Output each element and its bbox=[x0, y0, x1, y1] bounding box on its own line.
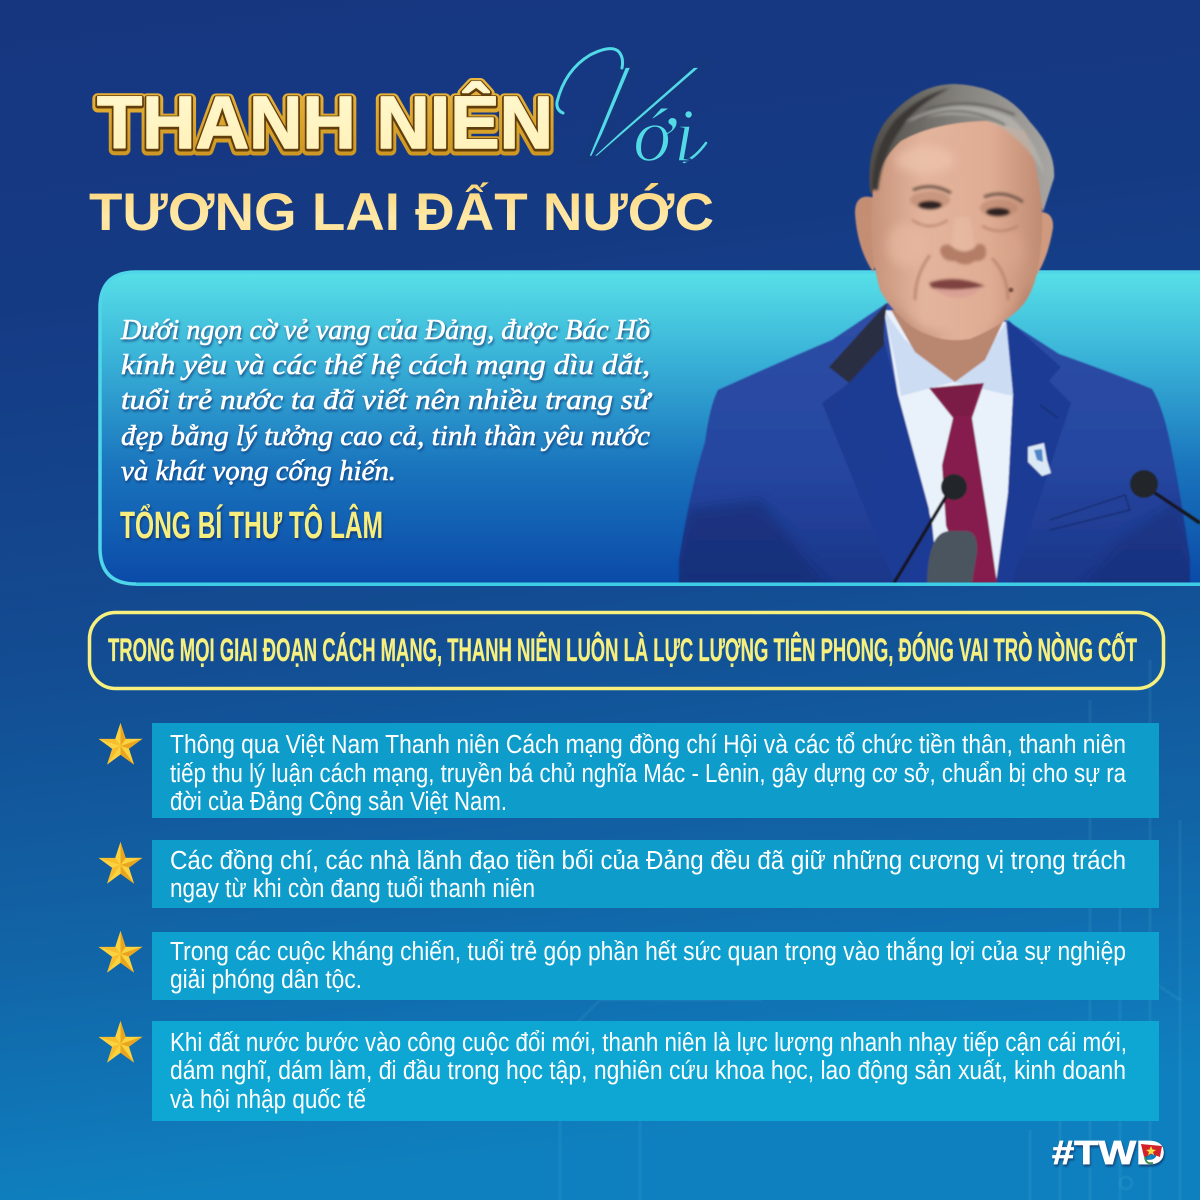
neck bbox=[891, 310, 1004, 382]
list item 3 bbox=[152, 932, 1159, 1000]
quote text: Dưới ngọn cờ vẻ vang của Đảng, được Bác Hồ bbox=[120, 315, 650, 346]
hair strands bbox=[872, 88, 1045, 190]
list item 2 bbox=[152, 840, 1159, 908]
quote text: kính yêu và các thế hệ cách mạng dìu dắt, bbox=[121, 350, 650, 381]
title: THANH NIÊN: THANH NIÊN bbox=[97, 81, 553, 164]
nose bbox=[940, 244, 986, 264]
icon: star 4 bbox=[99, 1021, 142, 1063]
panel edge line bbox=[136, 582, 1200, 586]
list item 3: giải phóng dân tộc. bbox=[170, 966, 362, 994]
shirt bbox=[884, 310, 1013, 583]
list item 1: đời của Đảng Cộng sản Việt Nam. bbox=[170, 788, 507, 816]
list item 4: và hội nhập quốc tế bbox=[170, 1086, 366, 1114]
icon: star 1 bbox=[99, 723, 142, 765]
eyes bbox=[918, 201, 942, 209]
quote text: tuổi trẻ nước ta đã viết nên nhiều trang sử bbox=[121, 385, 653, 416]
left dark collar bbox=[829, 303, 887, 383]
under-eye lines bbox=[912, 220, 1018, 231]
cheek folds bbox=[915, 255, 1008, 300]
panel: quote background bbox=[100, 272, 1200, 584]
icon: star 2 bbox=[99, 842, 142, 884]
quote text: đẹp bằng lý tưởng cao cả, tinh thần yêu nước bbox=[121, 421, 651, 452]
left lapel bbox=[822, 340, 938, 583]
microphones bbox=[894, 490, 950, 583]
list item 4 bbox=[152, 1021, 1159, 1121]
banner: key message bbox=[90, 612, 1164, 688]
title: THANH NIÊN: THANH NIÊN bbox=[97, 82, 553, 165]
list item 1 bbox=[152, 723, 1159, 818]
eye sockets bbox=[910, 191, 950, 209]
title: script word Với: ới bbox=[633, 94, 695, 178]
collar bbox=[884, 310, 1013, 396]
quote text: và khát vọng cống hiến. bbox=[121, 456, 396, 487]
mouth bbox=[929, 279, 985, 290]
eyebrows bbox=[913, 187, 1023, 202]
hair bbox=[869, 84, 1054, 212]
title: THANH NIÊN: THANH NIÊN bbox=[97, 83, 553, 166]
list item 2: Các đồng chí, các nhà lãnh đạo tiền bối của Đảng đều đã giữ những cương vị trọng trách bbox=[170, 847, 1126, 875]
face bbox=[872, 121, 1042, 340]
title: script word Với: V bbox=[524, 33, 731, 190]
quote text bbox=[120, 315, 653, 487]
hashtag logo: #TWD: #TWD bbox=[1052, 1134, 1165, 1171]
subtitle: TƯƠNG LAI ĐẤT NƯỚC: TƯƠNG LAI ĐẤT NƯỚC bbox=[89, 182, 714, 242]
quote attribution: TỔNG BÍ THƯ TÔ LÂM bbox=[120, 502, 383, 547]
list item 2: ngay từ khi còn đang tuổi thanh niên bbox=[170, 875, 535, 903]
tie bbox=[929, 383, 997, 583]
jacket bbox=[679, 303, 1190, 583]
portrait: speaker at podium bbox=[670, 84, 1200, 590]
right lapel bbox=[997, 320, 1071, 583]
facial features bbox=[910, 187, 1023, 300]
ears bbox=[855, 197, 885, 272]
lapel pin bbox=[1028, 443, 1051, 476]
icon: star 3 bbox=[99, 931, 142, 973]
